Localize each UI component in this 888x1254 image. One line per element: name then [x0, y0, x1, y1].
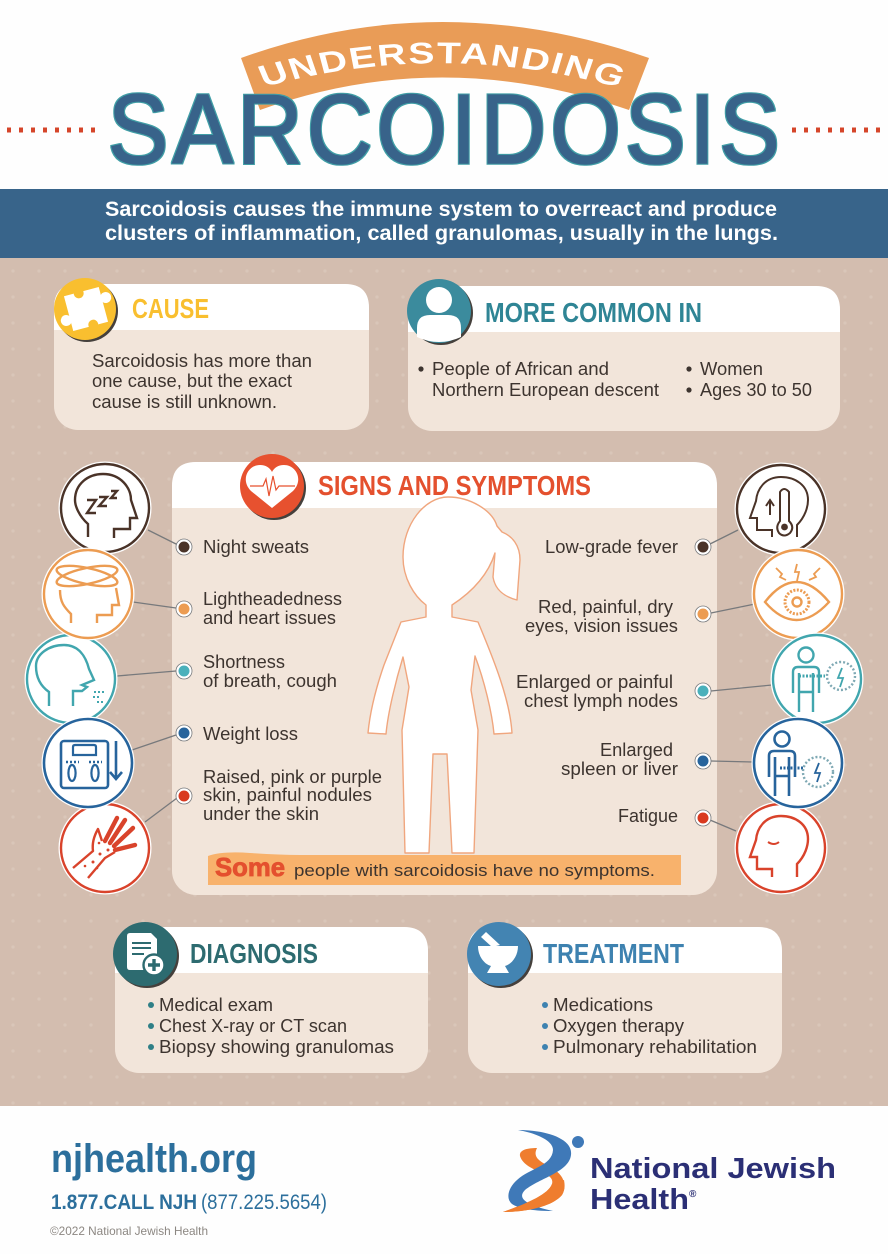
left symptoms: skin, painful nodules — [203, 785, 372, 805]
icon: cough head — [24, 632, 118, 726]
treatment heading: TREATMENT — [543, 938, 684, 969]
footer website: njhealth.org — [51, 1137, 257, 1181]
diagnosis list — [148, 995, 394, 1057]
right symptoms: Enlarged or painful — [516, 672, 673, 692]
panel: treatment — [467, 922, 782, 1073]
left symptoms: and heart issues — [203, 608, 336, 628]
logo wordmark: Health — [590, 1184, 689, 1216]
icon: chest lymph node — [770, 632, 864, 726]
footer phone: (877.225.5654) — [201, 1191, 327, 1214]
diagnosis list: Chest X-ray or CT scan — [159, 1016, 347, 1036]
bullet list: groups: Women — [700, 359, 763, 379]
logo mark — [503, 1130, 584, 1212]
right symptoms: chest lymph nodes — [524, 691, 678, 711]
panel: signs and symptoms — [172, 454, 717, 895]
diagnosis list: Medical exam — [159, 995, 273, 1015]
callout: some people — [208, 852, 681, 885]
footer phone — [51, 1191, 327, 1214]
bullet list: groups — [418, 359, 812, 400]
right symptoms: Red, painful, dry — [538, 597, 673, 617]
left symptoms: Raised, pink or purple — [203, 767, 382, 787]
symptoms heading: SIGNS AND SYMPTOMS — [318, 470, 591, 501]
footer phone: 1.877.CALL NJH — [51, 1191, 197, 1214]
connector lines — [117, 530, 772, 831]
callout emphasis: Some — [215, 852, 285, 882]
right symptoms: Enlarged — [600, 740, 673, 760]
icon: person — [407, 279, 473, 345]
left symptoms: Shortness — [203, 652, 285, 672]
right symptoms — [516, 537, 678, 826]
ribbon text: UNDERSTANDING — [258, 42, 623, 85]
treatment list: Pulmonary rehabilitation — [553, 1037, 757, 1057]
left symptoms: under the skin — [203, 804, 319, 824]
diagnosis heading: DIAGNOSIS — [190, 938, 318, 969]
left dotted rule — [7, 128, 96, 132]
treatment list — [542, 995, 757, 1057]
left symptoms — [203, 537, 382, 824]
icon: scale — [42, 716, 134, 810]
more common heading: MORE COMMON IN — [485, 297, 702, 328]
cause text: one cause, but the exact — [92, 371, 292, 391]
logo wordmark — [590, 1153, 836, 1216]
cause heading: CAUSE — [132, 293, 209, 324]
bullet list: groups: People of African and — [432, 359, 609, 379]
left symptoms: Weight loss — [203, 724, 298, 744]
treatment list: Medications — [553, 995, 653, 1015]
logo wordmark: National Jewish — [590, 1153, 836, 1185]
panel: diagnosis — [113, 922, 428, 1073]
icon: heart — [240, 454, 306, 520]
icon: fatigue head — [734, 802, 828, 894]
icon: mortar and pestle — [467, 922, 533, 988]
body silhouette — [368, 497, 520, 853]
cause text: cause is still unknown. — [92, 392, 277, 412]
left symptoms: Night sweats — [203, 537, 309, 557]
logo wordmark: ® — [689, 1189, 697, 1200]
intro text: clusters of inflammation, called granulomas, usually in the lungs. — [105, 222, 778, 245]
icon: medical document — [113, 922, 179, 988]
intro text: Sarcoidosis causes the immune system to overreact and produce — [105, 198, 777, 221]
icon: fever head — [734, 462, 828, 556]
right symptoms: spleen or liver — [561, 759, 678, 779]
icon: puzzle piece — [54, 278, 118, 342]
intro text — [105, 198, 778, 245]
cause text: Sarcoidosis has more than — [92, 351, 312, 371]
treatment list: Oxygen therapy — [553, 1016, 684, 1036]
icon: dizzy head — [42, 548, 134, 640]
panel: cause — [54, 278, 369, 430]
copyright: ©2022 National Jewish Health — [50, 1224, 208, 1238]
intro band — [0, 189, 888, 258]
banner ribbon — [241, 22, 649, 110]
title: SARCOIDOSIS — [108, 75, 780, 184]
bullet list: groups: Northern European descent — [432, 380, 659, 400]
right dotted rule — [792, 128, 888, 132]
cause text — [92, 351, 312, 412]
callout text: people with sarcoidosis have no symptoms. — [294, 861, 655, 880]
icon: skin rash hand — [58, 802, 152, 894]
left symptoms: of breath, cough — [203, 671, 337, 691]
icon: spleen liver — [752, 716, 844, 810]
panel: more common in — [407, 279, 840, 431]
background panel — [0, 258, 888, 1106]
bullet list: groups: Ages 30 to 50 — [700, 380, 812, 400]
icon: eye pain — [752, 548, 844, 640]
right symptoms: eyes, vision issues — [525, 616, 678, 636]
right symptoms: Low-grade fever — [545, 537, 678, 557]
left symptoms: Lightheadedness — [203, 589, 342, 609]
icon: sleeping head — [58, 462, 152, 554]
marker dots — [176, 539, 711, 826]
diagnosis list: Biopsy showing granulomas — [159, 1037, 394, 1057]
right symptoms: Fatigue — [618, 806, 678, 826]
